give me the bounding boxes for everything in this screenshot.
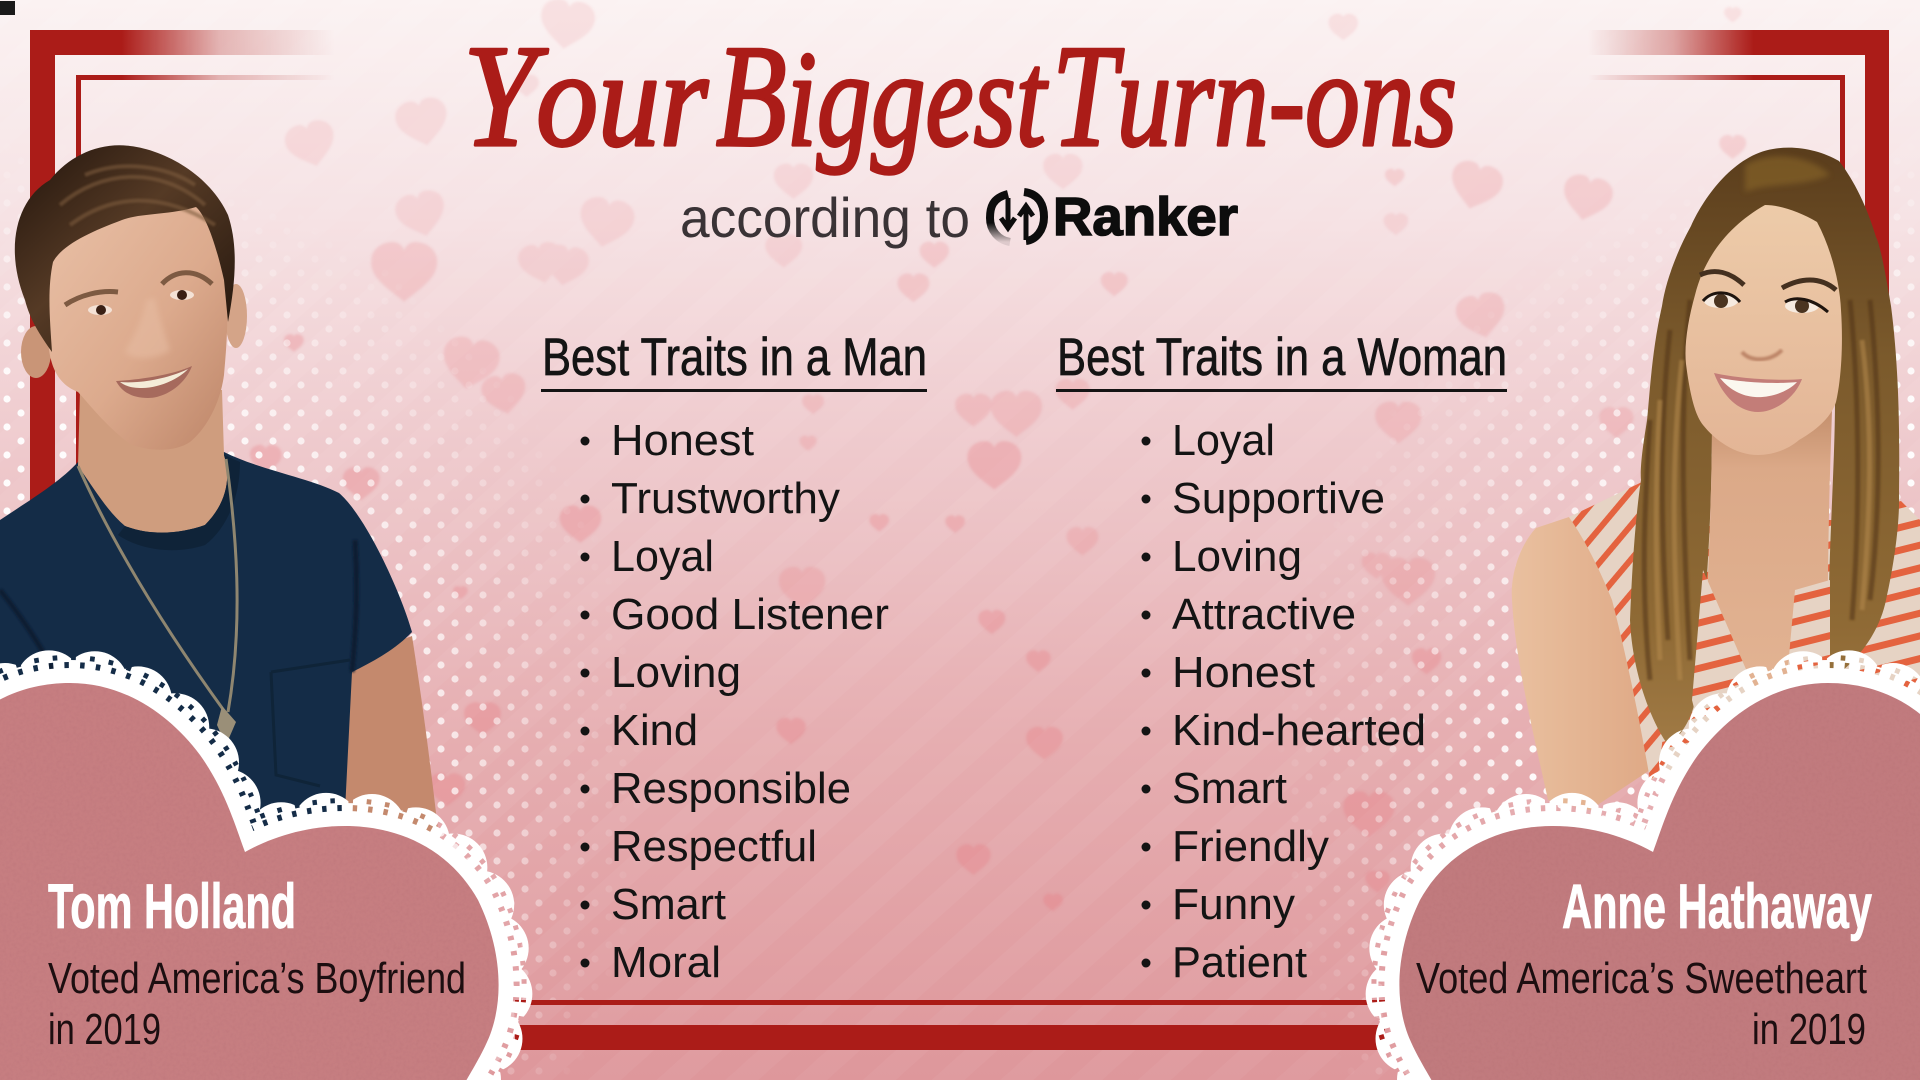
caption: Tom Holland: in 2019 <box>48 1005 161 1054</box>
portrait: Tom Holland <box>0 145 438 870</box>
list: women's traits: Kind-hearted <box>1172 706 1426 755</box>
list: men's traits: Kind <box>611 706 698 755</box>
list: men's traits: Loyal <box>611 532 714 581</box>
right corner frame <box>1588 30 1889 330</box>
title: Turn-ons <box>1052 15 1457 177</box>
list: men's traits: Trustworthy <box>611 474 840 523</box>
list: women's traits <box>1142 416 1426 987</box>
caption: Tom Holland: Voted America’s Boyfriend <box>48 954 466 1003</box>
title: Biggest <box>716 15 1048 177</box>
list: women's traits: Friendly <box>1172 822 1329 871</box>
list: women's traits: Smart <box>1172 764 1287 813</box>
list: men's traits: Good Listener <box>611 590 889 639</box>
list: women's traits: Attractive <box>1172 590 1356 639</box>
list: men's traits <box>580 416 889 987</box>
left corner frame <box>30 30 335 520</box>
list: men's traits: Honest <box>611 416 754 465</box>
subtitle: according to Ranker: according to <box>680 186 970 249</box>
list: women's traits: Patient <box>1172 938 1307 987</box>
subtitle: according to Ranker <box>680 186 1238 249</box>
list: men's traits: Responsible <box>611 764 851 813</box>
panel: Anne Hathaway lace heart <box>1399 683 1920 1080</box>
list: women's traits: Supportive <box>1172 474 1385 523</box>
panel: best traits in a man <box>541 328 927 987</box>
panel: best traits in a woman <box>1056 328 1507 987</box>
corner marker <box>0 1 15 15</box>
list: men's traits: Moral <box>611 938 721 987</box>
caption: Tom Holland <box>48 954 466 1054</box>
heading: women: Best Traits in a Woman <box>1057 328 1507 387</box>
panel: Tom Holland lace heart <box>0 683 499 1080</box>
halftone dots right <box>1306 217 1914 1074</box>
portrait: Anne Hathaway <box>1512 148 1920 810</box>
decorative hearts <box>250 0 1746 911</box>
name: Tom Holland: Tom Holland <box>48 872 296 942</box>
heading: men: Best Traits in a Man <box>542 328 927 387</box>
title: Your <box>463 15 709 177</box>
list: women's traits: Loving <box>1172 532 1302 581</box>
list: women's traits: Funny <box>1172 880 1295 929</box>
subtitle: according to Ranker: Ranker <box>1053 187 1238 247</box>
icon: Ranker logo mark <box>990 192 1044 242</box>
list: men's traits: Loving <box>611 648 741 697</box>
bottom red bars <box>515 1000 1385 1050</box>
caption: Anne Hathaway <box>1416 954 1867 1054</box>
title <box>463 15 1457 177</box>
list: men's traits: Smart <box>611 880 726 929</box>
caption: Anne Hathaway: in 2019 <box>1752 1005 1866 1054</box>
list: women's traits: Loyal <box>1172 416 1275 465</box>
halftone dots left <box>4 214 621 1074</box>
list: men's traits: Respectful <box>611 822 817 871</box>
list: women's traits: Honest <box>1172 648 1315 697</box>
